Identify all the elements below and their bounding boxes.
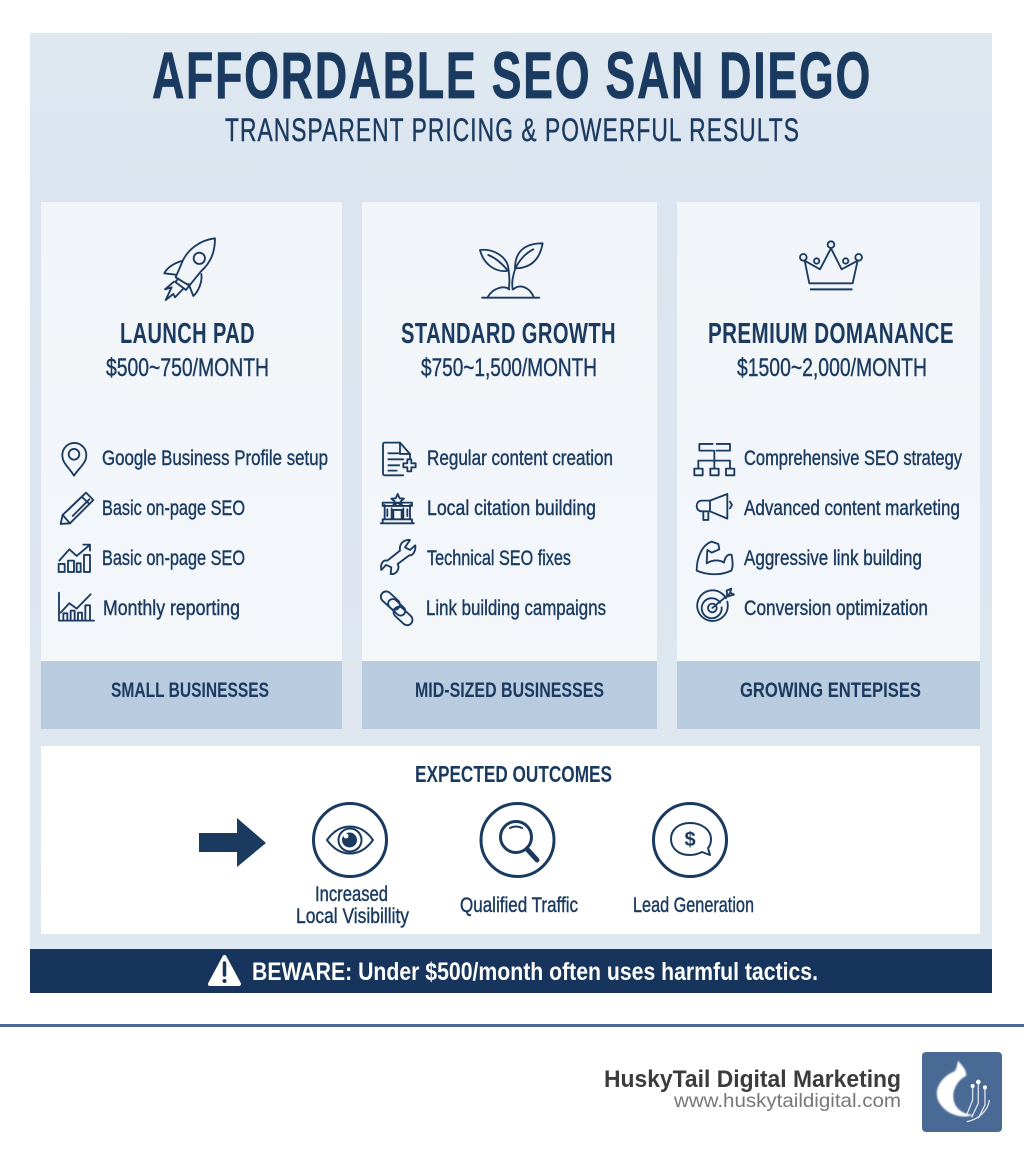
icon: map pin [62, 443, 86, 476]
feature text: Google Business Profile setup [102, 447, 328, 470]
audience band: SMALL BUSINESSES [111, 679, 269, 702]
price: $1500~2,000/MONTH [737, 354, 927, 382]
arrow [199, 818, 266, 867]
icon: sprout [480, 243, 543, 298]
panel: launch pad [41, 202, 342, 729]
price: $500~750/MONTH [106, 354, 269, 382]
feature text: Regular content creation [427, 447, 613, 470]
label: Increased [315, 883, 388, 906]
price: $750~1,500/MONTH [421, 354, 597, 382]
feature text: Link building campaigns [426, 597, 606, 620]
feature text: Technical SEO fixes [427, 547, 571, 570]
feature list [694, 444, 962, 621]
icon: crown [800, 241, 862, 289]
feature text: Comprehensive SEO strategy [744, 447, 962, 470]
feature text: Local citation building [427, 497, 596, 520]
audience band: MID-SIZED BUSINESSES [415, 679, 604, 702]
icon: dollar speech bubble [654, 804, 726, 876]
panel: expected outcomes [41, 746, 980, 934]
audience band: GROWING ENTEPISES [740, 679, 921, 702]
icon: document plus [383, 443, 416, 475]
icon: dollar speech bubble: $ [684, 829, 696, 851]
label [296, 883, 409, 928]
icon: wrench [381, 540, 415, 574]
warning banner [30, 949, 992, 993]
brand url: www.huskytaildigital.com [673, 1090, 901, 1112]
feature text: Monthly reporting [103, 597, 240, 620]
footer divider [0, 1024, 1024, 1027]
icon: growth chart [59, 545, 90, 572]
audience band [677, 661, 980, 729]
feature text: Conversion optimization [744, 597, 928, 620]
label: Qualified Traffic [460, 894, 578, 917]
icon: pencil [61, 493, 93, 524]
icon: building with star [381, 494, 414, 523]
icon: chain link [379, 589, 415, 627]
icon: eye [314, 804, 386, 876]
panel: standard growth [362, 202, 657, 729]
feature text: Aggressive link building [744, 547, 922, 570]
logo [922, 1052, 1002, 1132]
warning text: BEWARE: Under $500/month often uses harmful tactics. [252, 958, 818, 986]
audience band [362, 661, 657, 729]
icon: flexed arm [697, 542, 733, 574]
icon: hierarchy [694, 444, 734, 475]
icon: megaphone [697, 494, 732, 520]
feature list [59, 443, 328, 621]
icon: warning triangle [210, 957, 239, 984]
audience band [41, 661, 342, 729]
background panel [30, 33, 992, 993]
feature text: Basic on-page SEO [102, 497, 245, 520]
heading: EXPECTED OUTCOMES [415, 761, 612, 787]
label: Local Visibillity [296, 905, 409, 928]
panel: premium dominance [677, 202, 980, 729]
icon: magnifier [481, 804, 554, 876]
subtitle: TRANSPARENT PRICING & POWERFUL RESULTS [225, 112, 800, 148]
icon: rocket [164, 238, 215, 300]
heading: STANDARD GROWTH [401, 318, 616, 350]
icon: target [697, 589, 734, 621]
icon: report chart [59, 593, 94, 621]
heading: LAUNCH PAD [120, 318, 255, 350]
feature text: Basic on-page SEO [102, 547, 245, 570]
feature list [379, 443, 613, 627]
brand name: HuskyTail Digital Marketing [604, 1066, 901, 1093]
feature text: Advanced content marketing [744, 497, 960, 520]
label: Lead Generation [633, 894, 754, 917]
